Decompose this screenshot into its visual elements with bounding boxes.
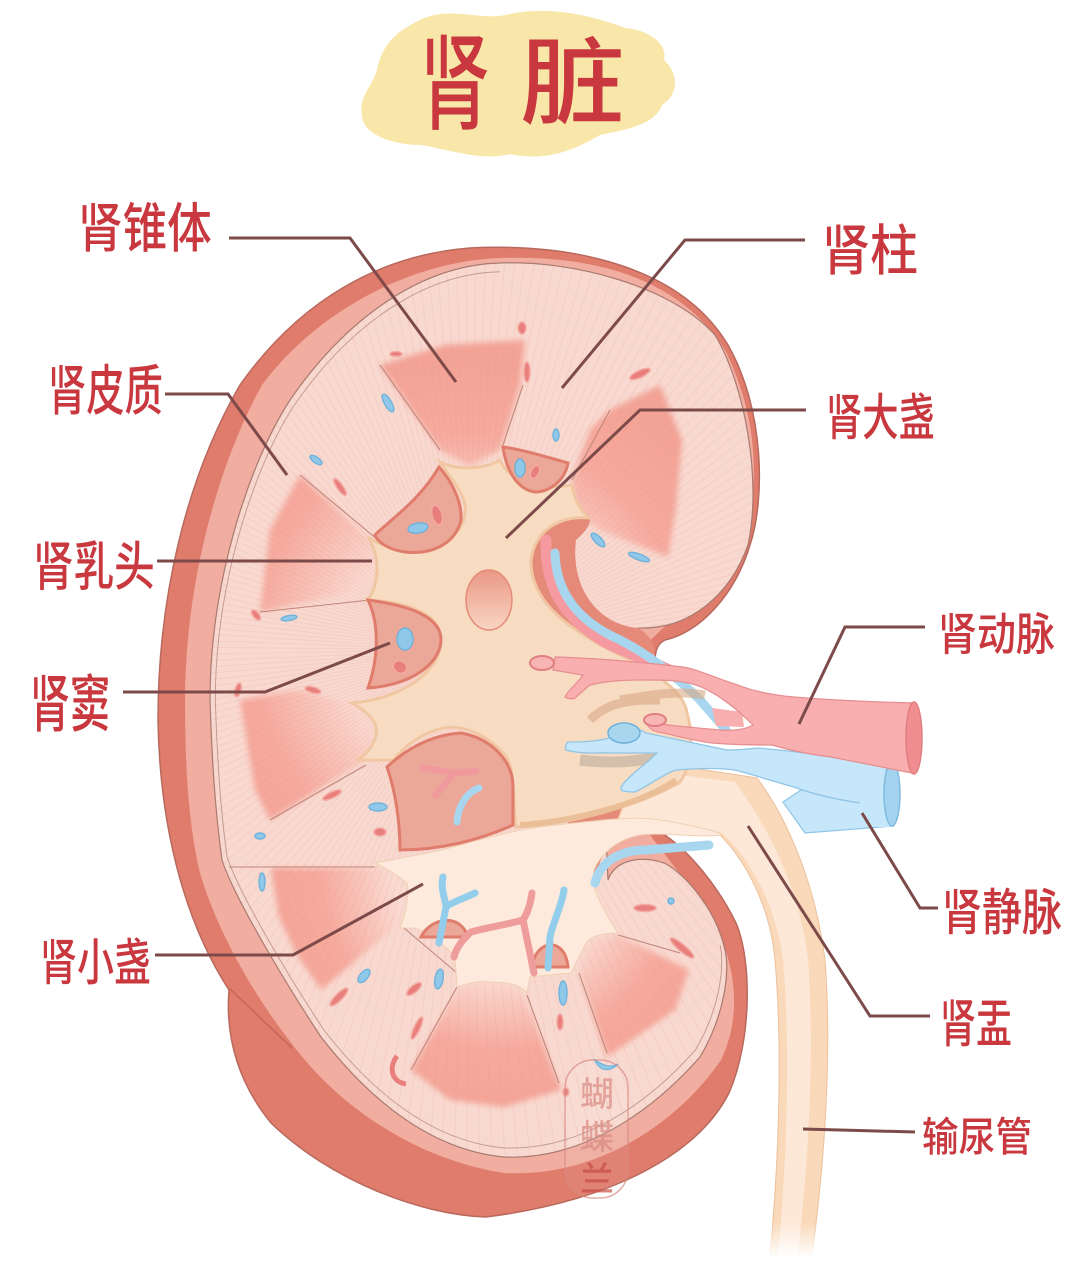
fossa oval [466,570,512,630]
ureter and renal pelvis outflow [610,760,840,1258]
label: 肾柱: 肾柱 [822,220,918,282]
label: 肾小盏: 肾小盏 [40,936,151,991]
small veins [255,393,674,1070]
small arteries [233,322,696,1096]
lower right island [532,945,568,967]
major calyx area [352,460,691,827]
label: 肾窦: 肾窦 [30,671,110,740]
vein shadow [580,752,680,762]
cortex inner contour line [215,272,722,1148]
renal sinus tissue islands [368,447,568,967]
title background blob [361,11,675,157]
kidney outer capsule [158,247,759,1217]
artery shadow [590,693,705,720]
calyx inner rim [520,780,676,825]
label: 肾静脉: 肾静脉 [942,885,1062,941]
middle island [368,600,441,688]
label: 肾锥体: 肾锥体 [78,199,212,259]
minor calyx area [375,818,722,993]
renal column outlines [229,365,680,1083]
watermark seal: 兰 [580,1161,614,1199]
radial striations of the medulla [150,330,790,970]
watermark seal: 蝴 [580,1076,614,1114]
label: 肾乳头: 肾乳头 [33,537,155,596]
leader lines [123,238,938,1132]
label: 肾皮质: 肾皮质 [48,361,163,423]
title text: 肾: 肾 [420,26,490,143]
calyx vessels [424,768,564,973]
upper left island [375,467,461,553]
hilum vessels in the tissue [546,540,726,883]
title [361,11,675,157]
title text: 脏: 脏 [520,32,625,137]
renal vein [565,723,900,833]
renal hilum tissue [520,513,655,905]
renal artery [530,656,922,774]
watermark seal: 蝶 [580,1119,614,1157]
lighter band under capsule [185,258,754,1173]
capsule fold line [229,988,292,1048]
lower left island [421,920,468,937]
label: 肾盂: 肾盂 [940,997,1012,1054]
renal pyramids [240,340,689,1107]
top island [503,447,568,492]
lower island [387,733,513,850]
label: 输尿管: 输尿管 [922,1115,1032,1160]
renal cortex [210,263,753,1157]
label: 肾动脉: 肾动脉 [938,609,1055,660]
label: 肾大盏: 肾大盏 [826,390,935,446]
watermark seal [565,1060,628,1199]
